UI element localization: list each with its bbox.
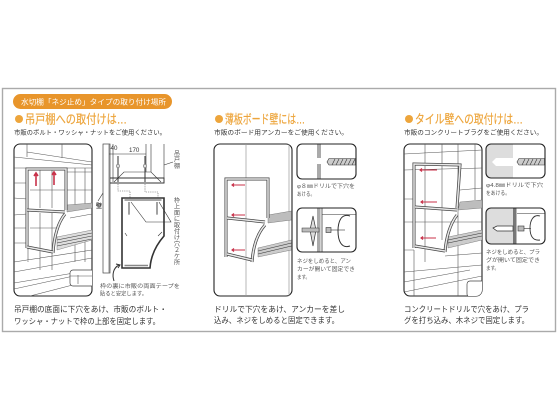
caption: plug: グが開いて固定でき [486,256,540,264]
tape arrow [113,264,120,281]
outer frame [2,88,556,332]
caption: plug: ネジをしめると、プラ [486,249,540,256]
installation diagram: 170 [129,147,140,154]
caption: masonry drill: φ4.8㎜ドリルで下穴 [486,182,543,189]
illustration: rack on board wall [214,144,292,296]
frame [122,198,164,268]
detail: masonry drill [486,144,545,178]
heading: tile wall: タイル壁への取付けは… [415,112,523,126]
tape note: 貼ると安定します。 [100,290,147,298]
caption: anchor [297,258,355,281]
caption: drill: φ８㎜ドリルで下穴を [297,183,355,190]
intro text: tile wall: 市販のコンクリートプラグをご使用ください。 [404,128,543,136]
body text: board wall: 込み、ネジをしめると固定できます。 [214,316,339,325]
arrows up [34,172,56,186]
dimensions: 40 [110,145,118,152]
title banner: 水切棚「ネジ止め」タイプの取り付け場所 [21,98,166,106]
arrows [232,184,245,252]
body text: tile wall [404,305,529,325]
caption: anchor: ます。 [297,274,310,281]
body text: tile wall: グを打ち込み、木ネジで固定します。 [404,315,529,325]
heading: board wall [215,112,305,126]
body text: board wall: ドリルで下穴をあけ、アンカーを差し [214,304,345,314]
tape note [100,282,180,298]
label: wall: 壁 [96,202,102,210]
illustration: rack under cabinet [14,144,94,296]
body text: hanging cabinet: ワッシャ・ナットで枠の上部を固定します。 [14,316,160,326]
body text: tile wall: コンクリートドリルで穴をあけ、プラ [404,305,529,314]
panel: thin board wall [214,112,356,325]
body text: hanging cabinet [14,304,167,326]
detail: anchor [297,208,356,252]
caption: anchor: カーが開いて固定でき [297,265,355,273]
caption: anchor: ネジをしめると、アン [297,258,351,265]
caption: plug: ます。 [486,265,499,272]
bolts [118,156,145,182]
installation diagram [96,144,180,298]
detail: plug [486,208,545,244]
intro text: board wall: 市販のボード用アンカーをご使用ください。 [214,128,348,136]
title banner [13,94,172,109]
heading: hanging cabinet: 吊戸棚への取付けは… [25,112,127,126]
label: cabinet: 吊戸棚 [172,150,180,170]
connector lines [118,184,158,203]
body text: hanging cabinet: 吊戸棚の底面に下穴をあけ、市販のボルト・ [14,304,167,314]
body text: board wall [214,304,345,325]
panel: hanging cabinet [14,112,180,326]
caption: plug [486,249,540,272]
caption: drill [297,183,355,198]
caption: masonry drill [486,182,543,197]
caption: masonry drill: をあける。 [486,190,510,197]
tape note: 枠の裏に市販の両面テープを [100,282,180,290]
shelf rack [27,169,92,253]
illustration: rack on tile wall [404,144,485,297]
heading: board wall: 薄板ボード壁には… [225,112,305,126]
detail: drill [297,144,356,179]
label: two holes: 枠上面に取付け穴２ケ所 [172,196,180,266]
caption: drill: あける。 [297,191,315,198]
intro text: hanging cabinet: 市販のボルト・ワッシャ・ナットをご使用ください。 [14,128,166,136]
panel: tile wall [404,112,545,325]
